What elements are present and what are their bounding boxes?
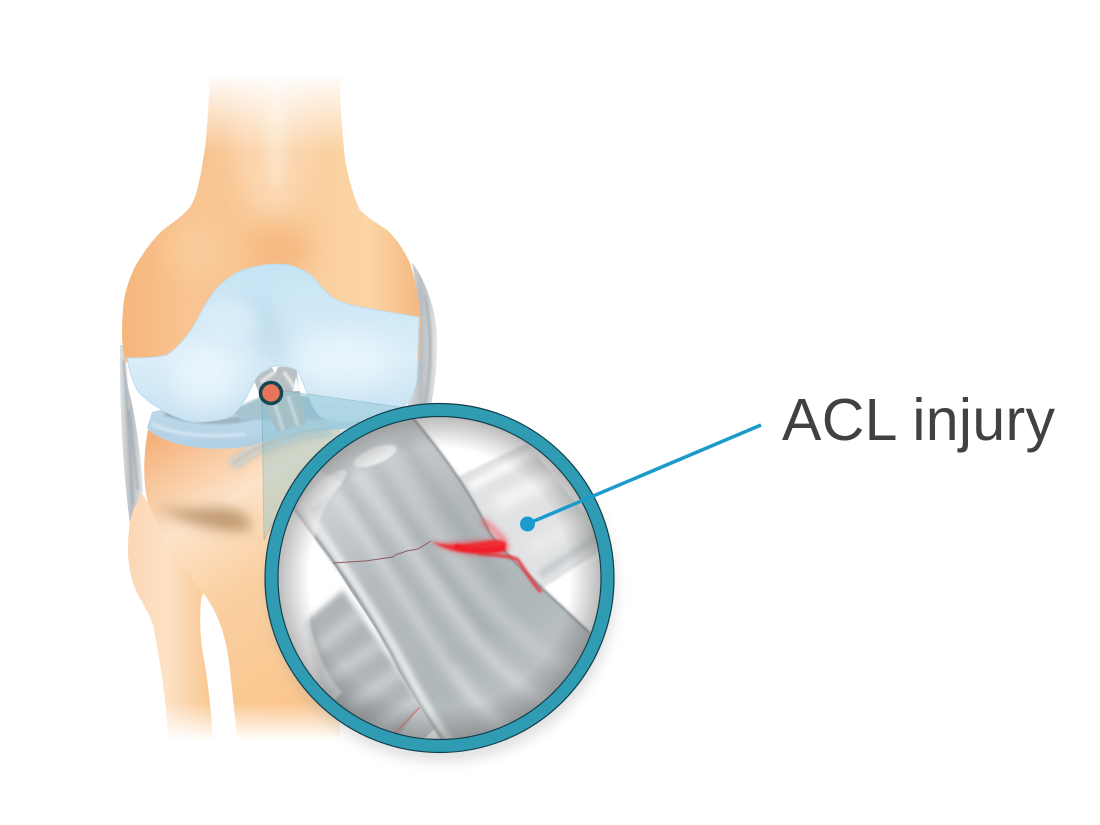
zoom cone connecting marker to lens bbox=[262, 391, 420, 540]
collateral ligament: left bbox=[120, 345, 143, 525]
tibia bbox=[144, 425, 340, 745]
lens vignette bbox=[276, 415, 602, 741]
upper right ligament band bbox=[458, 444, 598, 588]
ligament fan on tibia bbox=[228, 425, 330, 468]
lens background bbox=[276, 415, 602, 741]
tear in ligament bbox=[333, 520, 541, 592]
magnifying lens bbox=[264, 402, 620, 766]
cartilage on femur bbox=[127, 264, 419, 422]
marker circle on ACL bbox=[260, 382, 282, 404]
lens ligaments bbox=[240, 395, 640, 770]
lens shadow bbox=[268, 418, 616, 762]
label: ACL injury: ACL injury bbox=[782, 387, 1056, 453]
main torn ligament bbox=[294, 419, 591, 739]
cruciate ligaments in the notch bbox=[253, 366, 306, 432]
lens ring bbox=[272, 410, 608, 746]
fibula bbox=[128, 493, 213, 745]
collateral ligament: right bbox=[405, 262, 437, 412]
femur bbox=[122, 78, 421, 362]
meniscus bbox=[147, 406, 360, 449]
lens glass reflection bbox=[294, 471, 342, 700]
lower left ligament band bbox=[305, 590, 440, 750]
notch background behind ligaments bbox=[232, 396, 330, 420]
bottom fade of leg bones bbox=[150, 702, 365, 750]
knee ACL injury illustration bbox=[120, 78, 1055, 766]
callout line and dot bbox=[520, 425, 761, 532]
